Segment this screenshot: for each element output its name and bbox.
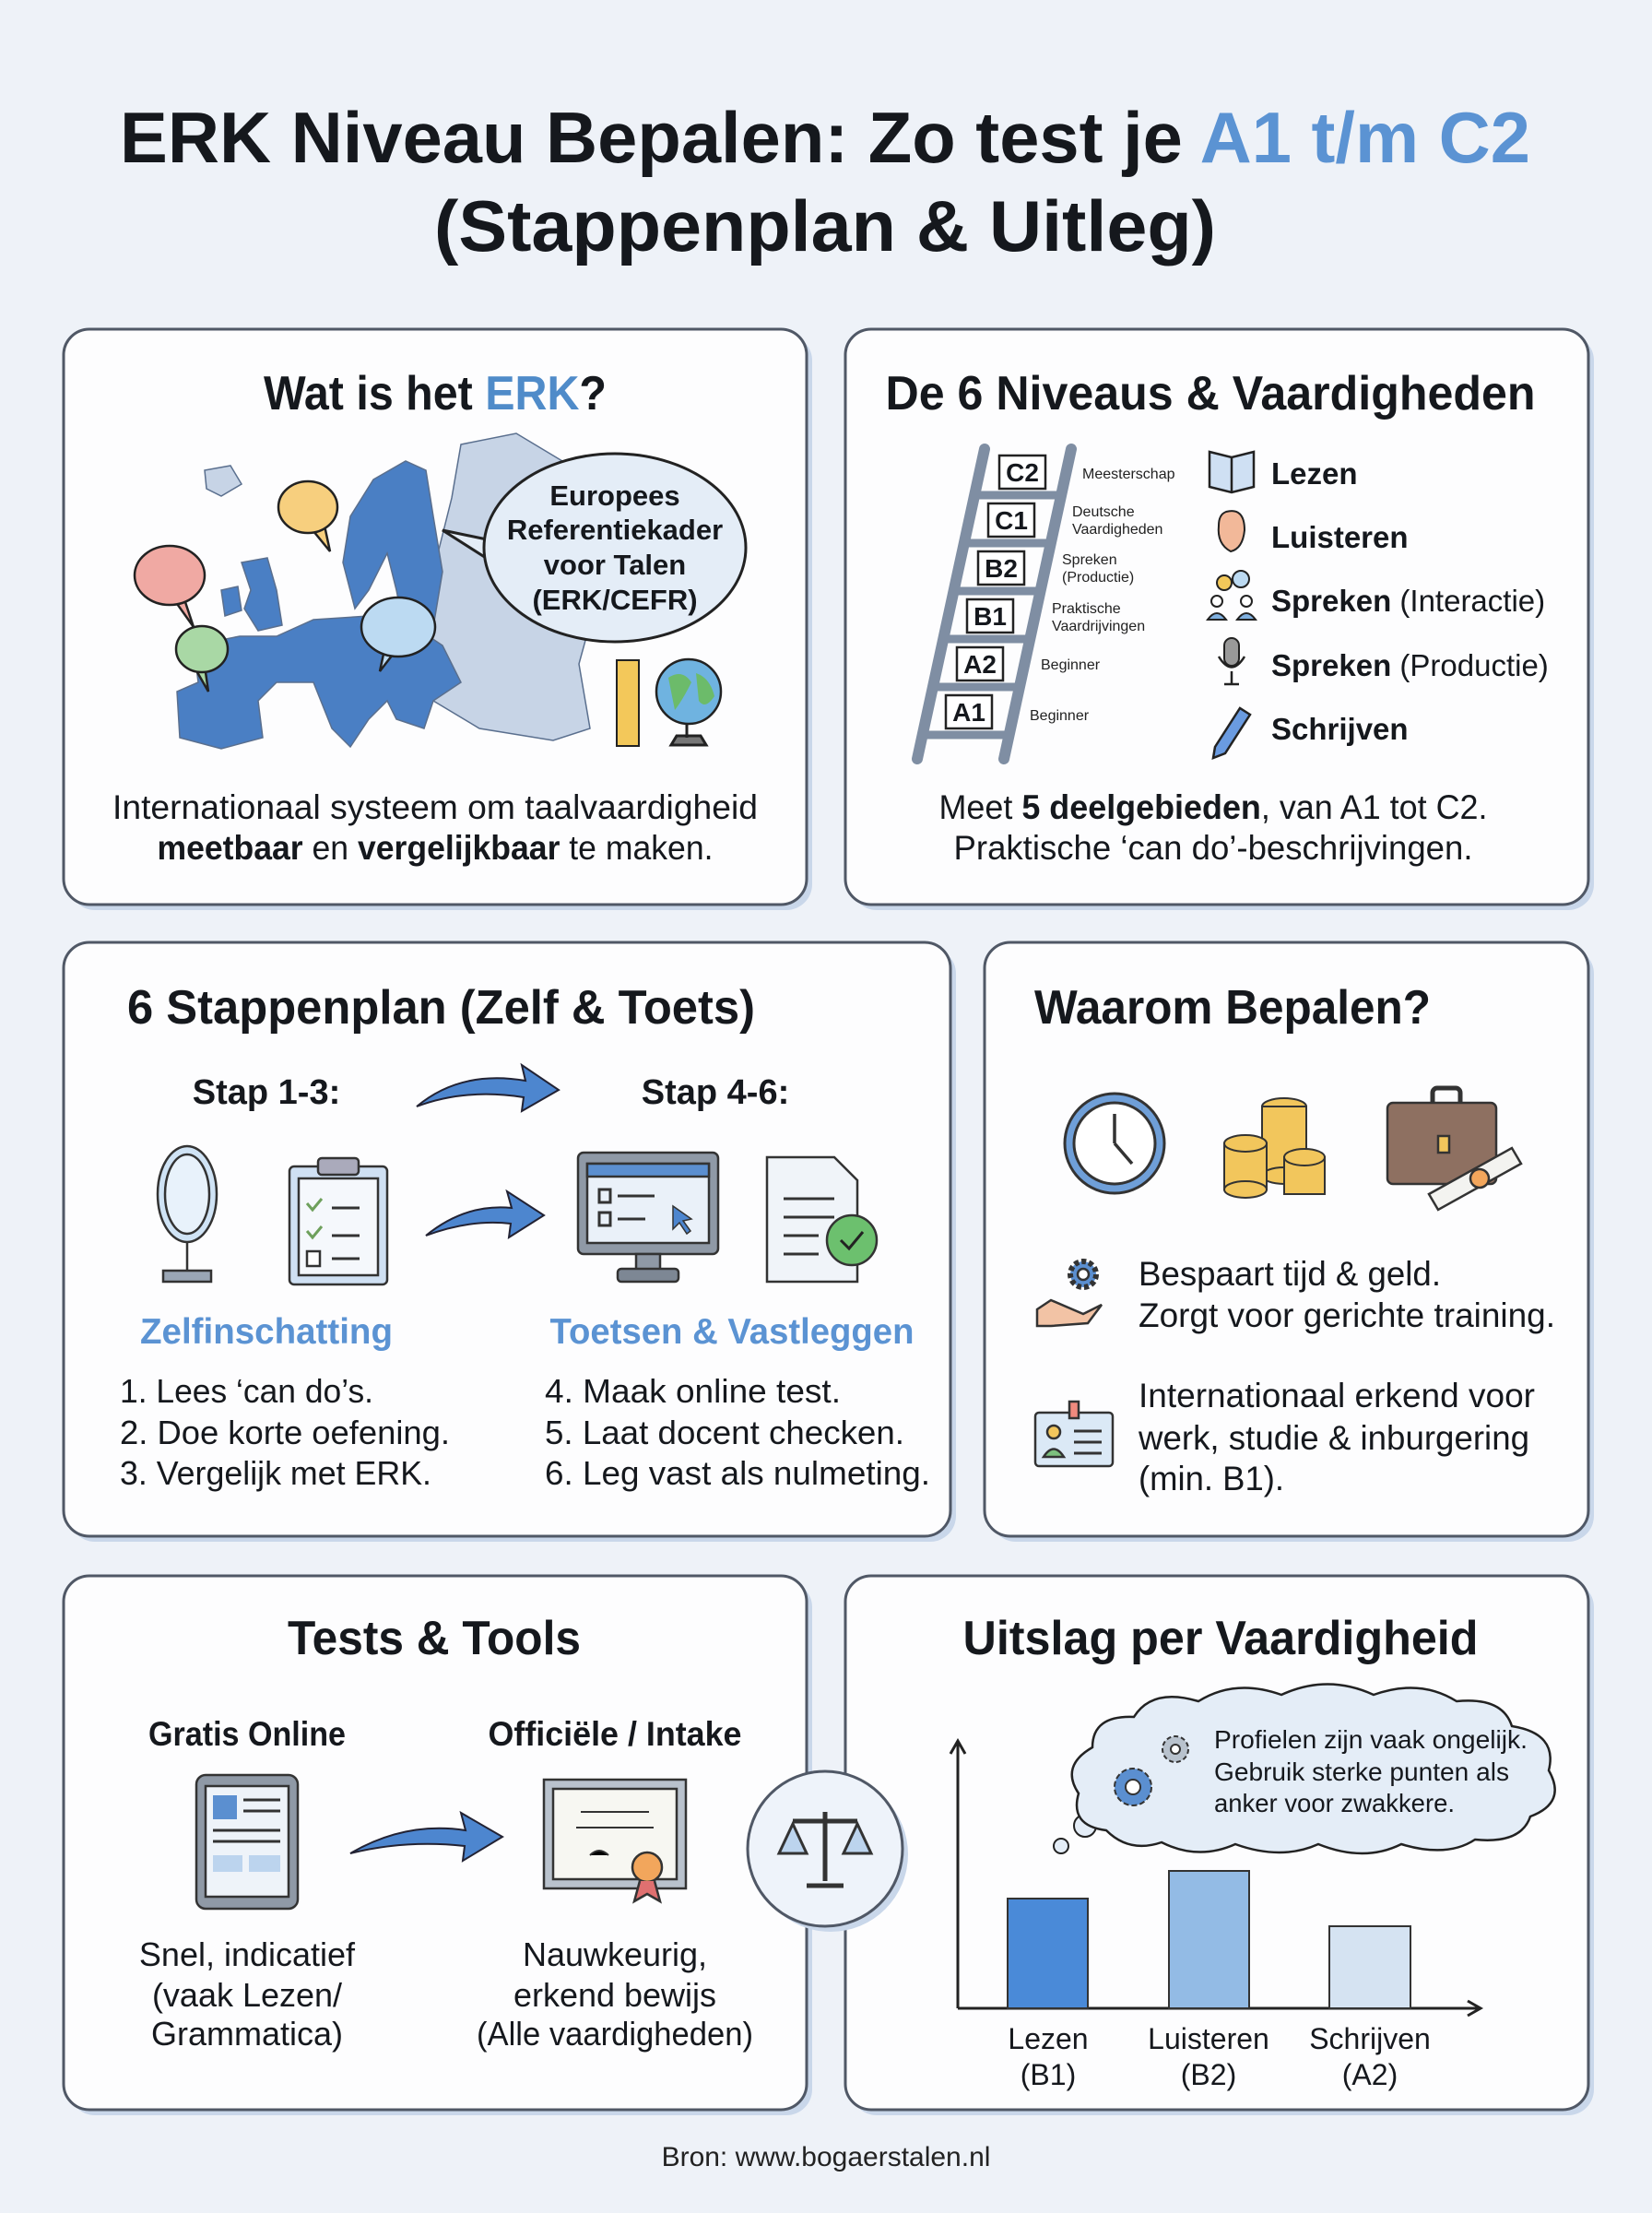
bar chart: Lezen [1008, 2022, 1089, 2055]
callout: europees referentiekader: Europees [549, 479, 680, 512]
panel: uitslag per vaardigheid [845, 1576, 1594, 2115]
panel: tests en tools: Officiële / Intake [489, 1715, 741, 1753]
text: zelfinschatting [120, 1312, 450, 1492]
text: bespaart: Bespaart tijd & geld. [1139, 1255, 1441, 1293]
footer: source: Bron: www.bogaerstalen.nl [662, 2142, 990, 2172]
heading: wat is het ERK: Wat is het ERK? [264, 367, 607, 420]
text: internationaal erkend: Internationaal erkend voor [1139, 1377, 1535, 1414]
text: body niveaus [938, 788, 1488, 867]
text: zelfinschatting: 1. Lees ‘can do’s. [120, 1372, 373, 1410]
panel: tests en tools: Gratis Online [148, 1715, 346, 1753]
icon: ruler and globe [617, 659, 721, 746]
text: toetsen en vastleggen: Toetsen & Vastleggen [549, 1312, 914, 1352]
subheadings [193, 1073, 789, 1112]
skills list: Spreken (Productie) [1271, 648, 1549, 682]
callout: europees referentiekader: voor Talen [544, 549, 686, 581]
bar chart [950, 1741, 1481, 2091]
text: tools descriptions: (vaak Lezen/ [152, 1976, 342, 2014]
text: zelfinschatting: Zelfinschatting [140, 1312, 393, 1352]
icon: document with check [767, 1157, 877, 1282]
title: (Stappenplan & Uitleg) [434, 185, 1216, 266]
bar chart: Luisteren [1148, 2022, 1269, 2055]
ladder: Beginner [1041, 657, 1101, 673]
panel: tests en tools [64, 1576, 812, 2115]
ladder [917, 449, 1175, 759]
heading: tests en tools: Tests & Tools [288, 1612, 581, 1665]
icon: mirror [158, 1146, 217, 1282]
ladder: C1 [995, 506, 1028, 535]
ladder: Meesterschap [1082, 467, 1175, 482]
text: tools descriptions: Grammatica) [151, 2015, 343, 2053]
ladder: Vaardigheden [1072, 522, 1162, 538]
icon: clock [1065, 1094, 1164, 1193]
text: zelfinschatting: 3. Vergelijk met ERK. [120, 1454, 431, 1492]
text: toetsen en vastleggen [545, 1312, 930, 1492]
icon: scale [748, 1771, 908, 1932]
arrow: middle [426, 1191, 544, 1237]
ladder: Spreken [1062, 552, 1117, 568]
text: tools descriptions: (Alle vaardigheden) [477, 2015, 753, 2053]
bar chart: (B1) [1021, 2058, 1076, 2091]
text: internationaal erkend [1138, 1377, 1535, 1497]
speech bubbles [135, 481, 435, 692]
heading: niveaus: De 6 Niveaus & Vaardigheden [885, 367, 1536, 420]
text: body: meetbaar en vergelijkbaar te maken. [157, 829, 714, 867]
text: tools descriptions: Nauwkeurig, [523, 1935, 707, 1973]
icon: clipboard [289, 1158, 387, 1284]
text: toetsen en vastleggen: 4. Maak online test. [545, 1372, 841, 1410]
text: tools descriptions [139, 1935, 753, 2053]
ladder: Deutsche [1072, 504, 1135, 520]
arrow: top [417, 1065, 559, 1111]
icon: monitor [578, 1153, 718, 1282]
ladder: Beginner [1030, 708, 1090, 724]
ladder: (Productie) [1062, 570, 1134, 586]
panel: de 6 niveaus [845, 329, 1594, 910]
skills list: Schrijven [1271, 712, 1409, 746]
ladder: A1 [952, 698, 985, 727]
callout: thought cloud: Profielen zijn vaak ongelijk. [1214, 1725, 1528, 1754]
text: toetsen en vastleggen: 6. Leg vast als nulmeting. [545, 1454, 930, 1492]
heading: uitslag: Uitslag per Vaardigheid [962, 1612, 1479, 1665]
ladder: A2 [963, 650, 997, 679]
text: body niveaus: Meet 5 deelgebieden, van A1 tot C2. [938, 788, 1488, 826]
text: bespaart: Zorgt voor gerichte training. [1139, 1296, 1555, 1334]
icon: tablet [196, 1775, 298, 1909]
subheadings: Stap 1-3: [193, 1073, 340, 1112]
callout: thought cloud: Gebruik sterke punten als [1214, 1757, 1509, 1786]
skills list: Lezen [1271, 456, 1358, 491]
ladder: Praktische [1052, 601, 1121, 617]
text: tools descriptions: erkend bewijs [513, 1976, 716, 2014]
text: internationaal erkend: werk, studie & inburgering [1138, 1419, 1529, 1457]
callout: europees referentiekader [442, 454, 746, 642]
icon: coins [1224, 1098, 1325, 1198]
text: bespaart [1139, 1255, 1555, 1334]
ladder: Vaardrijvingen [1052, 619, 1145, 634]
callout: thought cloud: anker voor zwakkere. [1214, 1789, 1455, 1817]
heading: stappenplan: 6 Stappenplan (Zelf & Toets) [127, 981, 755, 1035]
ladder: B2 [985, 554, 1018, 583]
ladder: B1 [974, 602, 1007, 631]
ladder: C2 [1006, 458, 1039, 487]
text: toetsen en vastleggen: 5. Laat docent checken. [545, 1414, 904, 1451]
heading: waarom: Waarom Bepalen? [1034, 981, 1431, 1035]
text: body [112, 788, 758, 867]
title [120, 97, 1530, 266]
icon: hand with gear [1037, 1261, 1102, 1326]
skills list: Luisteren [1271, 520, 1409, 554]
icon: briefcase and diploma [1387, 1088, 1521, 1210]
panel: waarom bepalen [985, 942, 1594, 1542]
text: body niveaus: Praktische ‘can do’-beschrijvingen. [953, 829, 1473, 867]
text: body: Internationaal systeem om taalvaardigheid [112, 788, 758, 826]
panel: wat is het ERK [64, 329, 812, 910]
callout: europees referentiekader: Referentiekader [507, 514, 723, 546]
arrow: tools [350, 1813, 502, 1861]
text: tools descriptions: Snel, indicatief [139, 1935, 356, 1973]
icon: id card [1035, 1402, 1113, 1466]
skills list [1208, 452, 1549, 758]
title: ERK Niveau Bepalen: Zo test je A1 t/m C2 [120, 97, 1530, 178]
subheadings: Stap 4-6: [642, 1073, 789, 1112]
map of europe [177, 433, 599, 749]
bar chart: (A2) [1342, 2058, 1398, 2091]
bar chart: Schrijven [1309, 2022, 1431, 2055]
icon: certificate [544, 1780, 686, 1901]
panel: stappenplan [64, 942, 956, 1542]
text: zelfinschatting: 2. Doe korte oefening. [120, 1414, 450, 1451]
bar chart: (B2) [1181, 2058, 1236, 2091]
callout: thought cloud [1054, 1684, 1555, 1853]
text: internationaal erkend: (min. B1). [1139, 1460, 1284, 1497]
skills list: Spreken (Interactie) [1271, 584, 1545, 618]
callout: europees referentiekader: (ERK/CEFR) [532, 584, 698, 616]
